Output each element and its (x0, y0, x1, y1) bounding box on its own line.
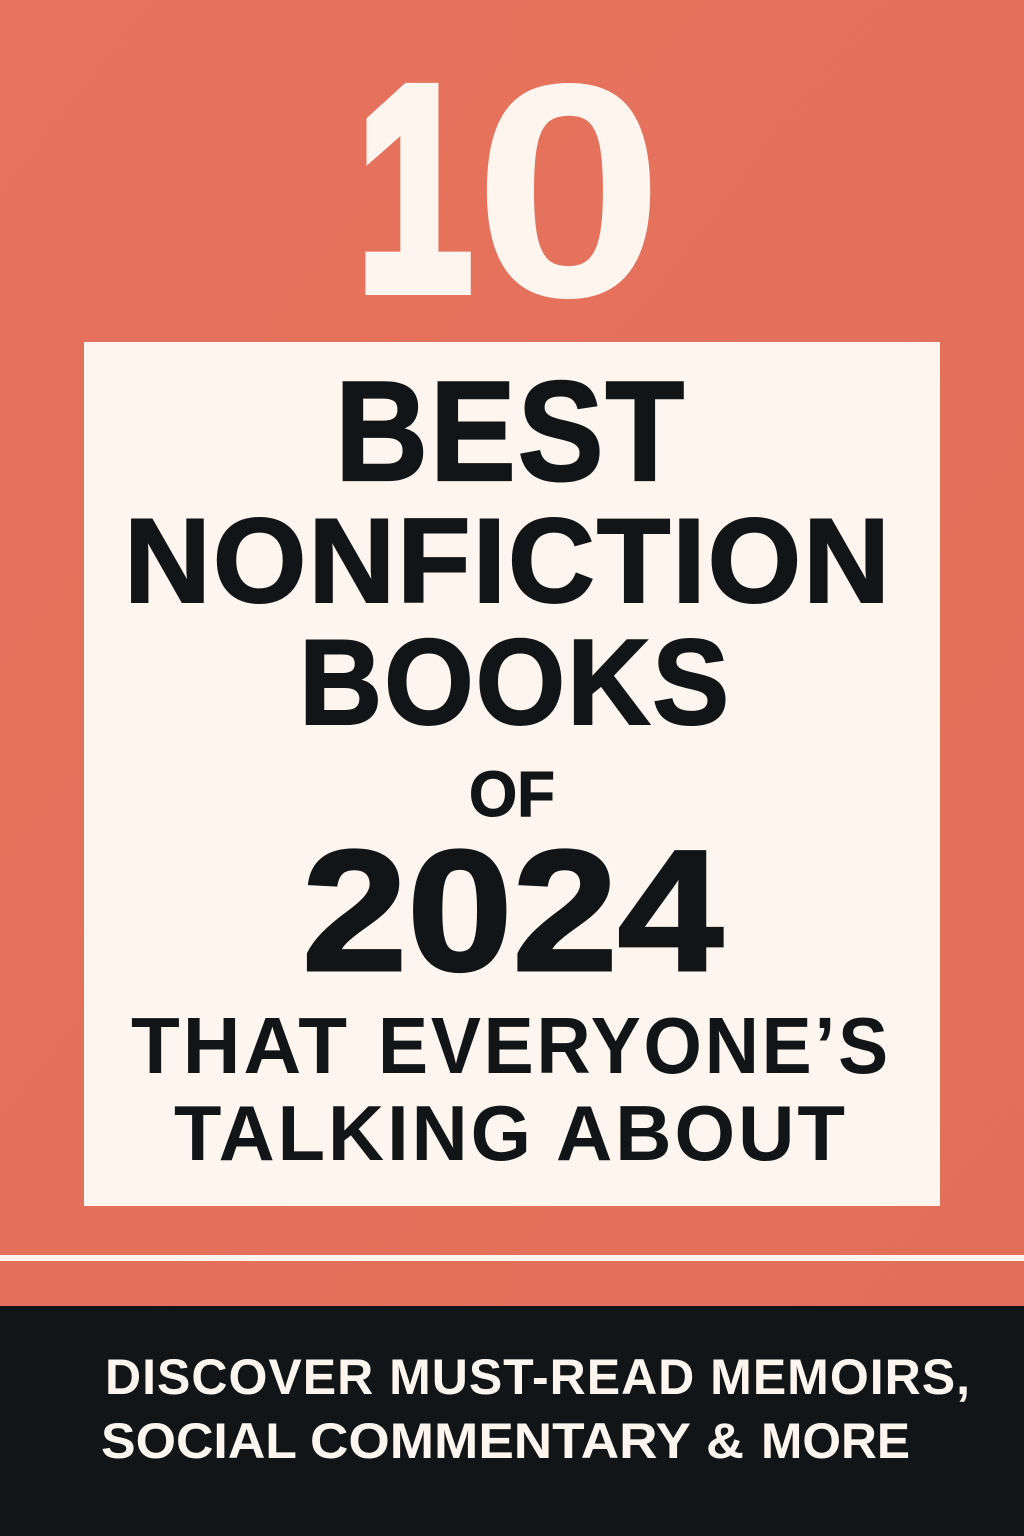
banner text line 2: COMMENTARY (310, 1413, 691, 1469)
banner text line 2: SOCIAL (101, 1413, 297, 1469)
big number 10 (358, 20, 664, 361)
heading: 2024: 2024 (302, 815, 723, 1007)
banner text line 2: & (706, 1413, 744, 1469)
heading: BOOKS: BOOKS (299, 614, 731, 750)
subheading: THAT EVERYONE'S (131, 1001, 891, 1090)
big number 10: 0 (473, 20, 664, 361)
heading: BEST: BEST (335, 352, 686, 511)
banner text line 1: DISCOVER MUST-READ MEMOIRS, (105, 1349, 970, 1405)
subheading: TALKING ABOUT: ABOUT (556, 1089, 848, 1177)
cream divider line (0, 1255, 1024, 1261)
subheading: THAT EVERYONE'S: EVERYONE’S (378, 1001, 891, 1090)
heading: NONFICTION: NONFICTION (124, 494, 892, 628)
banner text line 2: MORE (761, 1413, 910, 1469)
subheading: TALKING ABOUT: TALKING (174, 1089, 534, 1177)
big number 10: 1 (358, 28, 472, 350)
subheading: TALKING ABOUT (174, 1089, 848, 1177)
heading: OF: OF (469, 758, 555, 830)
subheading: THAT EVERYONE'S: THAT (131, 1001, 350, 1090)
panel: title card (84, 342, 940, 1206)
banner text line 2 (101, 1413, 910, 1469)
panel: bottom banner (0, 1306, 1024, 1536)
